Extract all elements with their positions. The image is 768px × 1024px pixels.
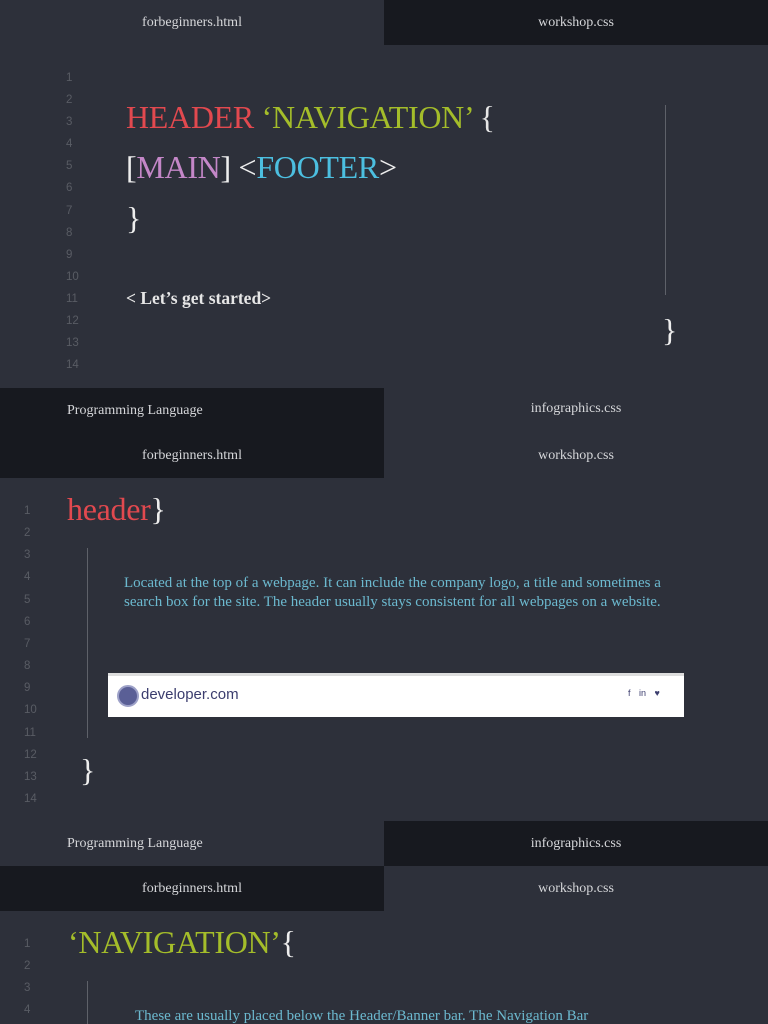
image: developer.com header (108, 673, 684, 717)
panel: intro code: 3 (66, 116, 72, 128)
bar: programming language 2 (0, 821, 768, 911)
panel: intro code: 14 (66, 359, 79, 371)
panel: navigation: These are usually placed below the Header/Banner bar. The Navigation Bar (135, 1008, 588, 1024)
panel: header: 5 (24, 594, 30, 606)
panel: header: } (80, 752, 95, 788)
bar: programming language 2: Programming Language (67, 836, 203, 851)
panel: header: 14 (24, 793, 37, 805)
panel: intro code: 12 (66, 315, 79, 327)
panel: intro code: 9 (66, 249, 72, 261)
panel: header: 1 (24, 505, 30, 517)
panel: navigation: ‘NAVIGATION’{ (68, 924, 296, 960)
panel: header: 8 (24, 660, 30, 672)
panel: header: Located at the top of a webpage. It can include the company logo, a title and sometimes a (124, 575, 661, 591)
image: developer.com header: f in ♥ (628, 688, 660, 698)
tab bar 1: forbeginners.html (142, 15, 242, 30)
panel: navigation (24, 924, 588, 1024)
bar: programming language: forbeginners.html (142, 448, 242, 463)
panel: intro code: [MAIN] <FOOTER> (126, 149, 397, 185)
tab bar 1 (142, 0, 768, 45)
panel: intro code: 8 (66, 227, 72, 239)
bar: programming language 2: workshop.css (538, 881, 614, 896)
panel: header: 7 (24, 638, 30, 650)
panel: intro code: 11 (66, 293, 78, 305)
panel: navigation: 3 (24, 982, 30, 994)
bar: programming language: workshop.css (538, 448, 614, 463)
panel: intro code: 10 (66, 271, 79, 283)
panel: intro code: 2 (66, 94, 72, 106)
bar: programming language 2: forbeginners.html (142, 881, 242, 896)
bar: programming language (0, 388, 621, 478)
panel: navigation: 1 (24, 938, 30, 950)
panel: intro code: 4 (66, 138, 72, 150)
panel: header: 13 (24, 771, 37, 783)
panel: navigation: 4 (24, 1004, 30, 1016)
tab bar 1: workshop.css (538, 15, 614, 30)
panel: header: 12 (24, 749, 37, 761)
panel: intro code: } (126, 200, 141, 236)
panel: header: 2 (24, 527, 30, 539)
panel: header: 9 (24, 682, 30, 694)
panel: header: 10 (24, 704, 37, 716)
panel: intro code: 6 (66, 182, 72, 194)
panel: header: search box for the site. The header usually stays consistent for all webpages on a website. (124, 594, 661, 610)
bar: programming language: Programming Language (67, 403, 203, 418)
bar: programming language: infographics.css (531, 401, 621, 416)
panel: header (24, 491, 684, 805)
panel: header: 3 (24, 549, 30, 561)
panel: intro code: 7 (66, 205, 72, 217)
panel: intro code: 1 (66, 72, 72, 84)
panel: header: 11 (24, 727, 36, 739)
panel: header: 6 (24, 616, 30, 628)
panel: header: header} (67, 491, 166, 527)
panel: intro code (66, 72, 677, 371)
panel: intro code: 5 (66, 160, 72, 172)
panel: intro code: 13 (66, 337, 79, 349)
bar: programming language 2: infographics.css (531, 836, 621, 851)
image: developer.com header: developer.com (141, 686, 239, 703)
panel: intro code: HEADER ‘NAVIGATION’ { (126, 99, 495, 135)
panel: intro code: } (662, 312, 677, 348)
panel: intro code: < Let’s get started> (126, 288, 271, 308)
panel: header: 4 (24, 571, 30, 583)
panel: navigation: 2 (24, 960, 30, 972)
